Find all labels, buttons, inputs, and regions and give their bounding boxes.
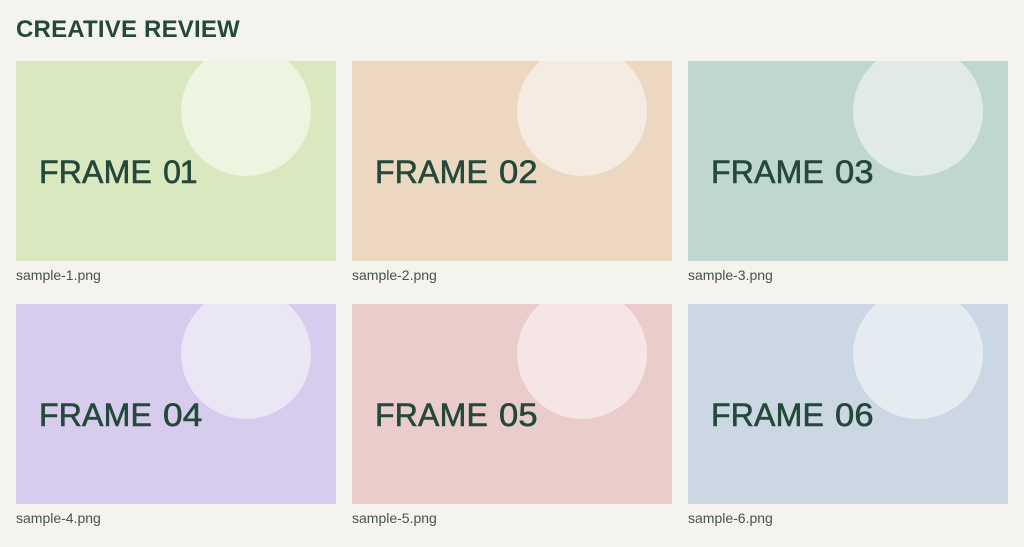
thumbnail: frame 05 [352, 304, 672, 504]
panel: frame 06 [688, 304, 1008, 526]
caption: sample-4: sample-4.png [16, 510, 101, 526]
thumbnail: frame 06 [688, 304, 1008, 504]
panel: frame 05 [352, 304, 672, 526]
thumbnail: frame 01 [16, 61, 336, 261]
thumbnail: frame 01: FRAME [39, 154, 152, 190]
thumbnail: frame 03: FRAME [711, 154, 824, 190]
caption: sample-2: sample-2.png [352, 267, 437, 283]
panel: frame 03 [688, 61, 1008, 283]
panel: frame 01 [16, 61, 336, 283]
thumbnail: frame 04 [16, 304, 336, 504]
panel: frame 02 [352, 61, 672, 283]
title: CREATIVE REVIEW [16, 16, 240, 43]
thumbnail: frame 03: 03 [835, 154, 874, 190]
thumbnail: frame 02: 02 [499, 154, 538, 190]
caption: sample-1: sample-1.png [16, 267, 101, 283]
caption: sample-5: sample-5.png [352, 510, 437, 526]
panel: frame 04 [16, 304, 336, 526]
thumbnail: frame 02 [352, 61, 672, 261]
caption: sample-6: sample-6.png [688, 510, 773, 526]
caption: sample-3: sample-3.png [688, 267, 773, 283]
thumbnail: frame 04: FRAME [39, 397, 152, 433]
thumbnail: frame 05: FRAME [375, 397, 488, 433]
thumbnail: frame 06: FRAME [711, 397, 824, 433]
thumbnail: frame 05: 05 [499, 397, 538, 433]
thumbnail: frame 02: FRAME [375, 154, 488, 190]
thumbnail: frame 01: 01 [163, 154, 196, 190]
thumbnail: frame 06: 06 [835, 397, 874, 433]
thumbnail: frame 03 [688, 61, 1008, 261]
thumbnail: frame 04: 04 [163, 397, 203, 433]
